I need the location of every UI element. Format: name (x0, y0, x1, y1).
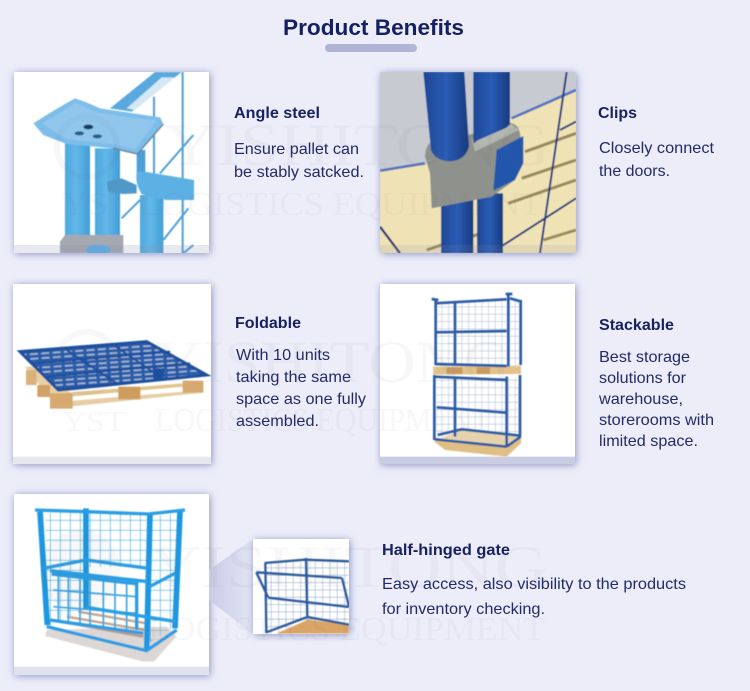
panel: half-hinged gate photo (14, 494, 209, 675)
watermark: LOGISTICS EQUIPMENT (148, 611, 545, 648)
watermark: LOGISTICS EQUIPMENT (155, 402, 490, 439)
watermark: YISHITONG (165, 112, 550, 178)
text block: foldable: taking the same (236, 369, 351, 386)
text block: angle steel: be stably satcked. (234, 164, 364, 181)
text block: foldable: space as one fully (236, 391, 366, 408)
text block: half-hinged gate (382, 542, 686, 618)
text block: foldable: assembled. (236, 413, 319, 430)
watermark: YISHITONG (148, 534, 548, 600)
text block: angle steel: Ensure pallet can (234, 141, 359, 158)
text block: clips: Clips (598, 105, 637, 122)
panel: clips photo (380, 72, 576, 253)
text block: stackable: solutions for (599, 370, 687, 387)
watermark: YST LOGISTICS EQUIPMENT (62, 186, 542, 223)
callout connector (209, 539, 253, 634)
title underline bar (325, 44, 417, 52)
panel: angle steel photo (14, 72, 209, 255)
text block: stackable: Stackable (599, 317, 674, 334)
text block: angle steel (234, 105, 364, 181)
watermark (40, 112, 550, 648)
watermark: YST (62, 407, 125, 438)
text block: half-hinged gate: for inventory checking. (382, 601, 545, 618)
text block: stackable: Best storage (599, 349, 690, 366)
text block: half-hinged gate: Easy access, also visibility to the products (382, 576, 686, 593)
panel: stackable photo (380, 284, 575, 464)
watermark: YISHITONG (155, 329, 510, 395)
text block: foldable: Foldable (235, 315, 301, 332)
text block: clips (598, 105, 715, 180)
text block: stackable (598, 317, 714, 450)
text block: foldable: With 10 units (236, 347, 330, 364)
text block: stackable: warehouse, (598, 391, 683, 408)
inset: half-hinged gate detail (253, 539, 349, 634)
text block: stackable: limited space. (599, 433, 698, 450)
text block: half-hinged gate: Half-hinged gate (382, 542, 510, 559)
text block: angle steel: Angle steel (234, 105, 320, 122)
text block: clips: the doors. (599, 163, 670, 180)
text block: stackable: storerooms with (599, 412, 714, 429)
title: Product Benefits (283, 15, 464, 40)
text block: foldable (235, 315, 366, 430)
text block: clips: Closely connect (599, 140, 715, 157)
panel: foldable photo (13, 284, 211, 464)
